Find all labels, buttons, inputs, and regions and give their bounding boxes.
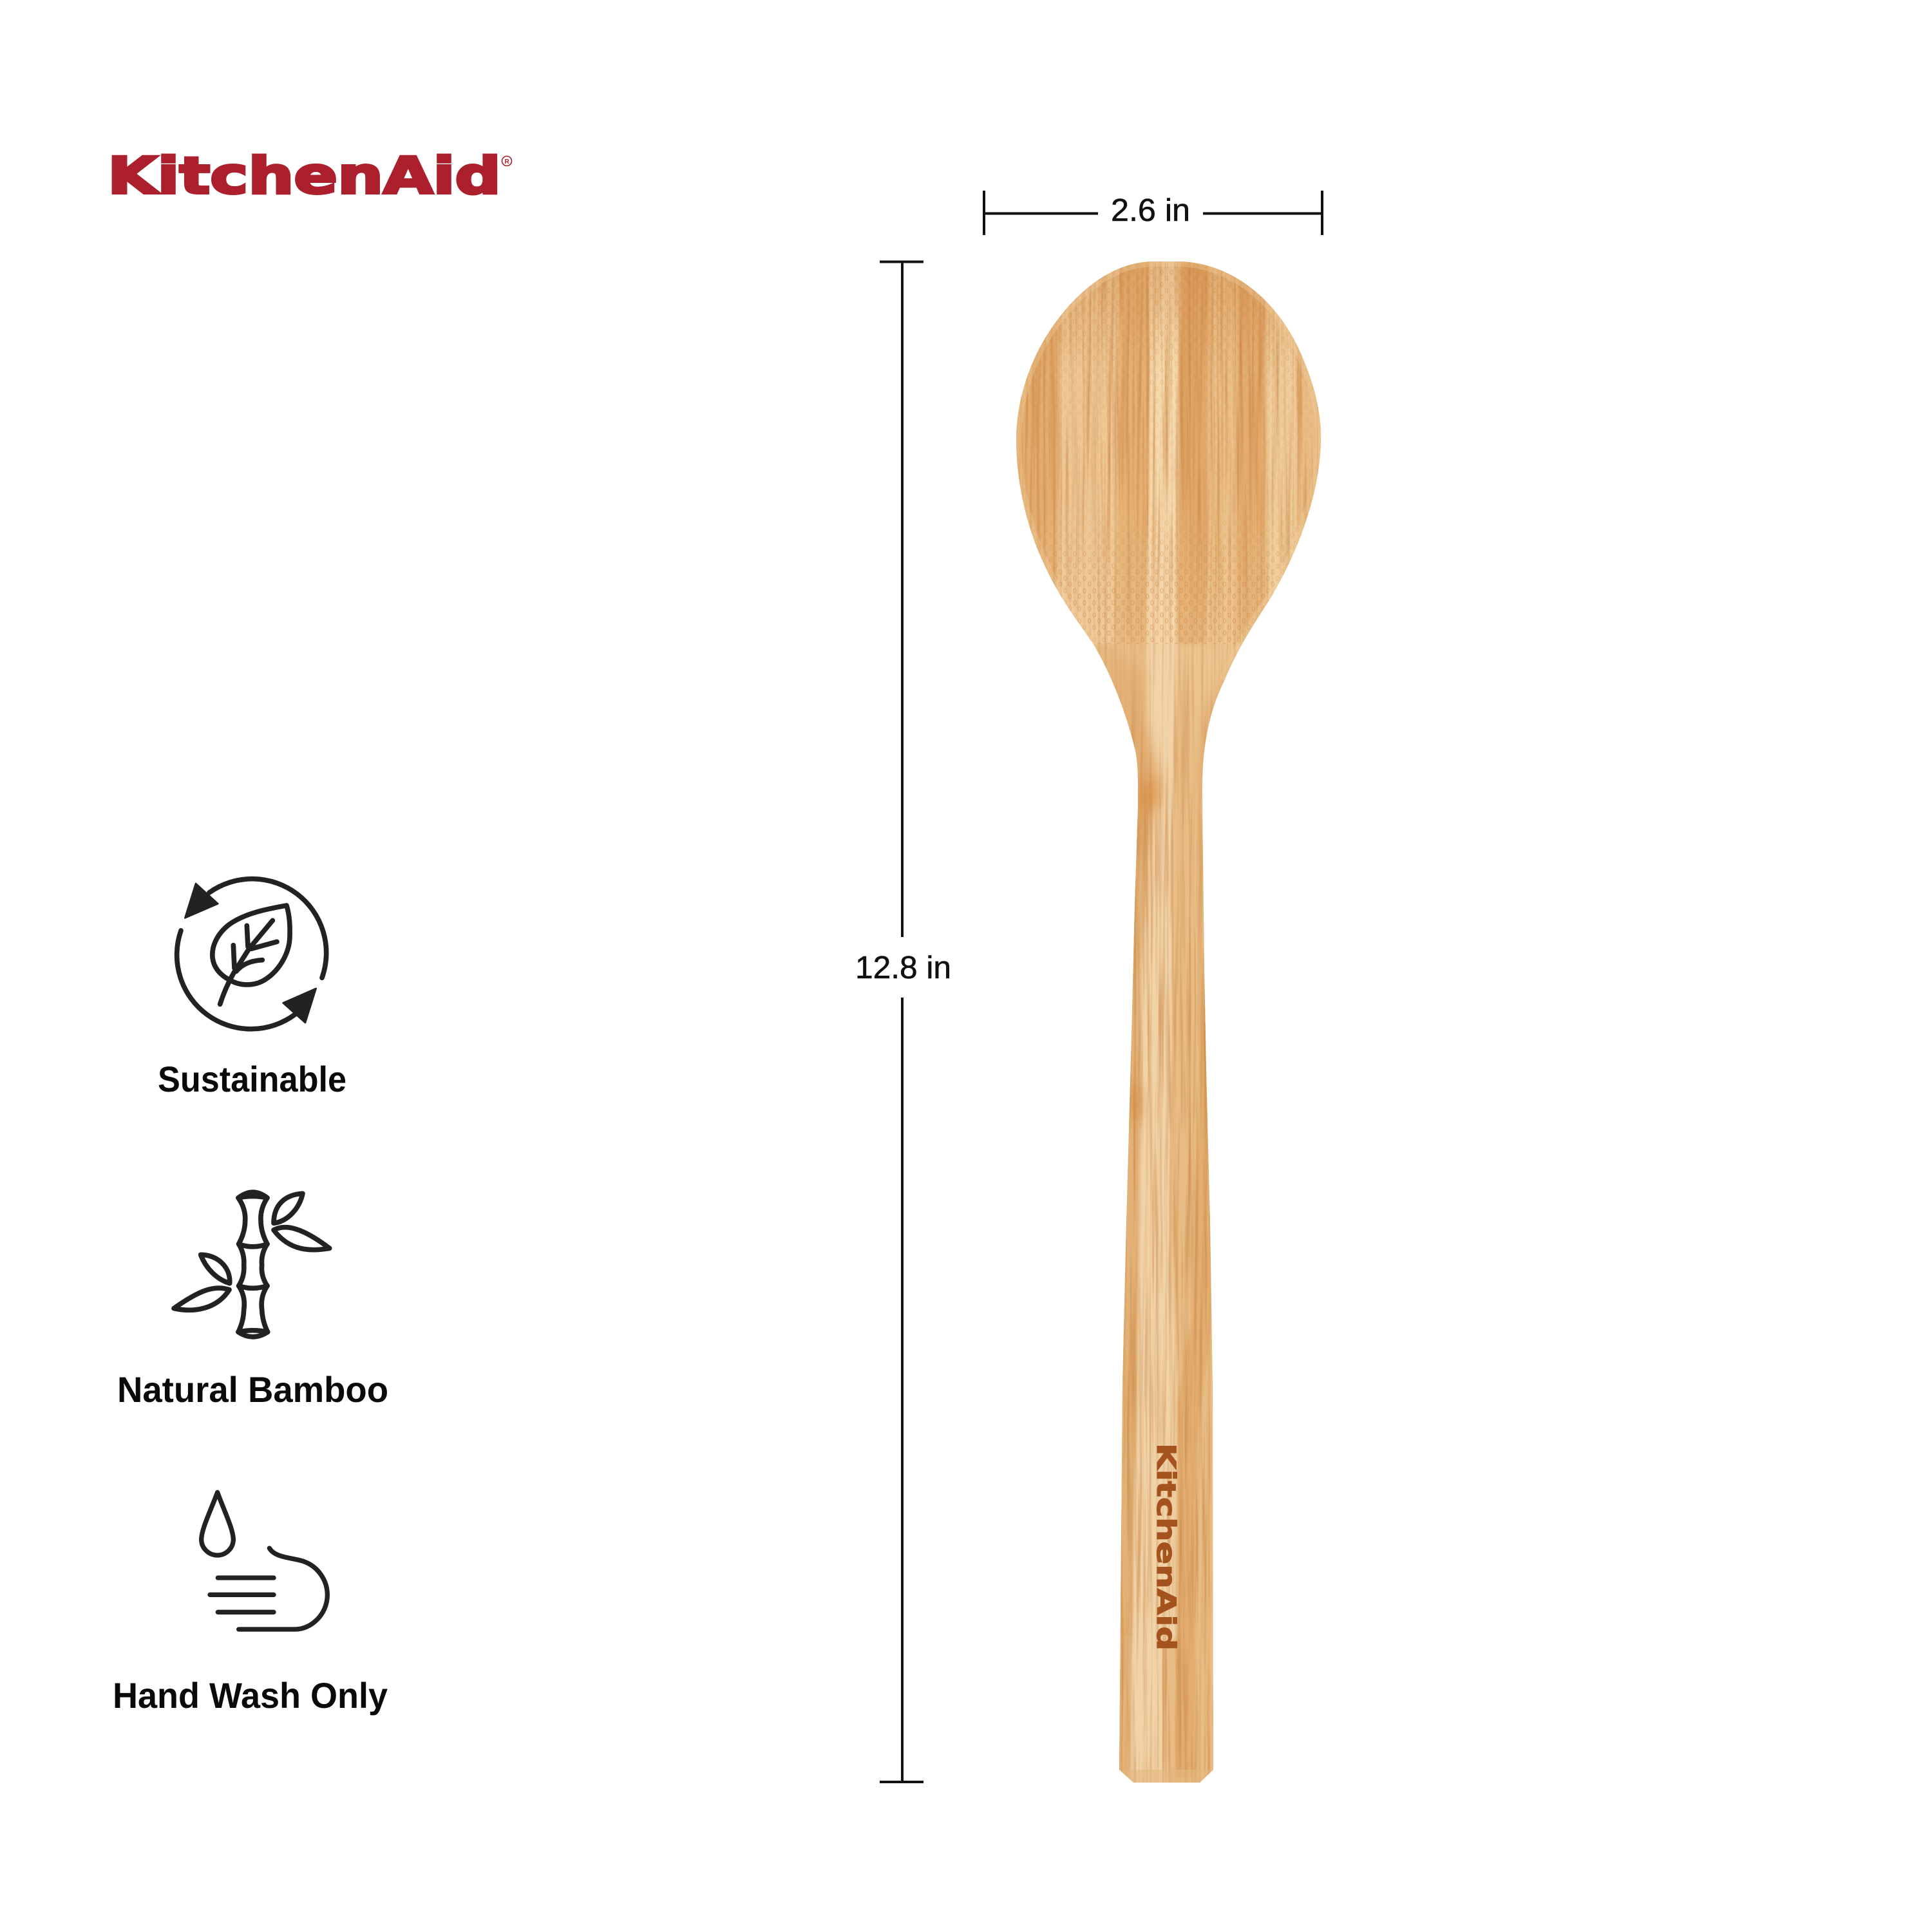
dimension: width 2.6 in — [984, 191, 1322, 235]
dimension: length 12.8 in: 12.8 in — [855, 951, 951, 985]
dimension: width 2.6 in: 2.6 in — [1111, 193, 1190, 228]
icon: sustainable leaf with circular arrows — [177, 879, 327, 1029]
label: Sustainable: Sustainable — [158, 1059, 346, 1099]
engraved logo on handle: KitchenAid — [1151, 1443, 1180, 1651]
handle end chamfer — [1119, 1770, 1213, 1783]
bamboo spoon — [1005, 258, 1333, 1790]
neck shading — [1100, 653, 1230, 1124]
icon: bamboo stalk — [174, 1192, 330, 1337]
label: Natural Bamboo: Natural Bamboo — [117, 1369, 388, 1410]
bamboo node texture — [1011, 264, 1327, 644]
spoon rim — [1016, 261, 1321, 681]
label: Hand Wash Only: Hand Wash Only — [113, 1675, 388, 1716]
bowl shading — [1061, 261, 1289, 345]
brand logo: KitchenAid: R — [505, 158, 510, 166]
brand logo: KitchenAid: KitchenAid — [108, 147, 501, 205]
wood texture — [1011, 258, 1327, 1790]
icon: water drop and hand — [202, 1492, 327, 1629]
dimension: length 12.8 in — [855, 261, 951, 1782]
